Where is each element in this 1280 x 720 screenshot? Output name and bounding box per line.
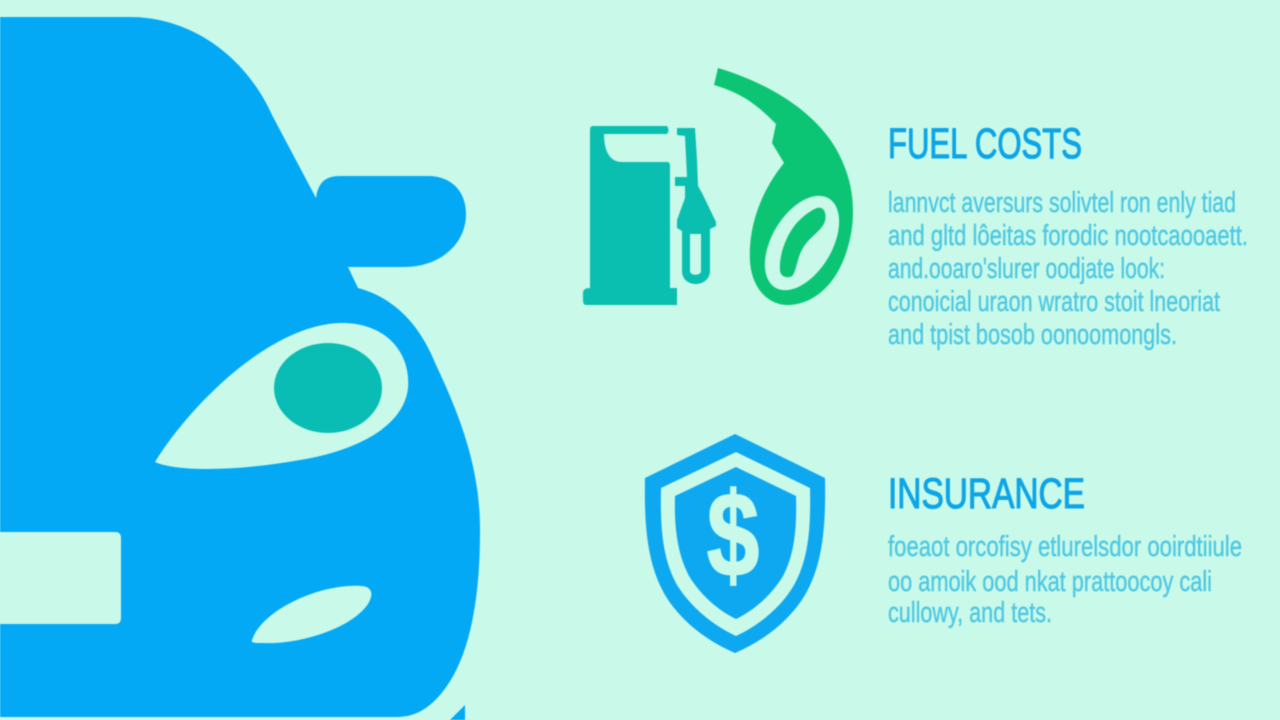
shield outer bbox=[645, 434, 825, 653]
pump hose and nozzle bbox=[675, 128, 716, 284]
headlight lens bbox=[274, 343, 382, 433]
number plate bbox=[0, 532, 121, 624]
heading: insurance: INSURANCE bbox=[888, 470, 1085, 518]
car body bbox=[0, 17, 480, 717]
fog light bbox=[252, 586, 371, 643]
text block: fuel costs description: and.ooaro'slurer oodjate look: bbox=[888, 253, 1165, 285]
shield ring bbox=[661, 452, 810, 636]
dollar sign: $ bbox=[707, 467, 759, 602]
text block: insurance description bbox=[888, 531, 1242, 629]
nozzle handle bbox=[780, 208, 826, 277]
nozzle silhouette bbox=[714, 68, 853, 305]
icon: insurance shield bbox=[645, 434, 825, 653]
text block: fuel costs description: and tpist bosob oonoomongls. bbox=[888, 319, 1177, 351]
text block: fuel costs description bbox=[888, 187, 1248, 351]
car illustration bbox=[0, 17, 480, 720]
heading: fuel costs: FUEL COSTS bbox=[888, 120, 1082, 168]
pump body bbox=[583, 126, 677, 305]
car corner fragment bbox=[450, 705, 465, 720]
headlight bbox=[155, 323, 408, 469]
icon: fuel pump bbox=[583, 126, 716, 305]
nozzle ring bbox=[750, 183, 854, 303]
icon: green fuel nozzle bbox=[714, 68, 854, 305]
text block: insurance description: cullowy, and tets. bbox=[888, 597, 1052, 629]
shield inner bbox=[675, 467, 796, 619]
